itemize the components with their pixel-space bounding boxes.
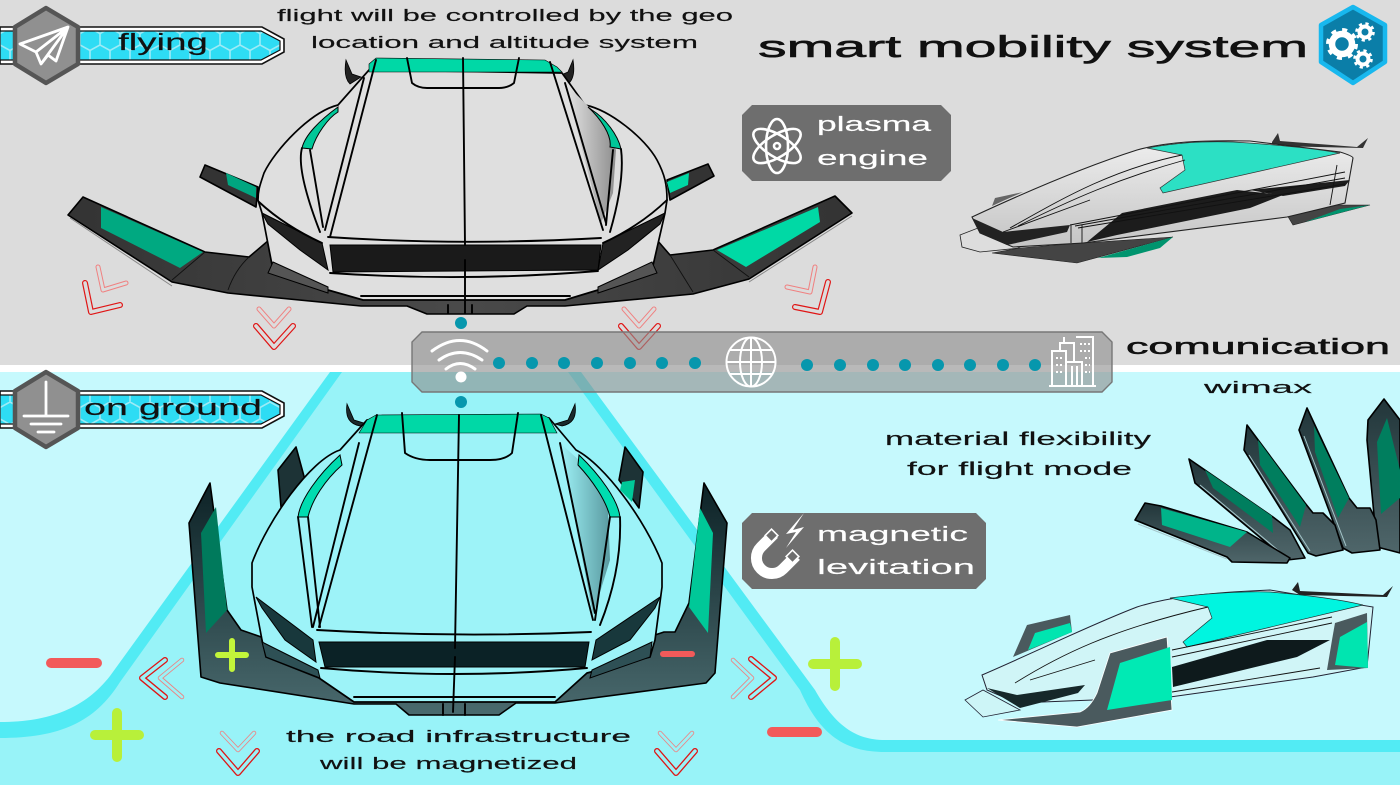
background: ground zone [0, 365, 1400, 785]
caption: flight control: location and altitude system [311, 33, 698, 52]
caption: magnetized road: the road infrastructure [286, 727, 631, 746]
caption: flight control [277, 6, 733, 52]
signal dots [493, 357, 1041, 371]
label: wimax: wimax [1202, 378, 1313, 397]
hull [982, 590, 1373, 703]
icon: atom [748, 119, 806, 173]
icon: wifi [432, 340, 487, 382]
rear mirrors [347, 404, 575, 426]
raised main wing [189, 483, 727, 715]
caption: flight control: flight will be controlled by the geo [277, 6, 733, 25]
icon: gears [1321, 7, 1385, 83]
teal canopy [1147, 142, 1340, 193]
banner: on ground [0, 391, 284, 428]
side view: ground mode [965, 582, 1393, 727]
caption: magnetized road [286, 727, 631, 773]
hull lines [1015, 607, 1332, 692]
chevron down right [657, 733, 695, 773]
front lip [960, 228, 1020, 252]
front lip [965, 690, 1020, 717]
title: smart mobility system [758, 29, 1308, 64]
wing flexibility sequence [1135, 399, 1400, 563]
white separator strip [0, 365, 1400, 372]
banner: flying [0, 27, 284, 64]
under fin [992, 237, 1173, 263]
body lines [298, 413, 620, 715]
chevron down left centre [256, 309, 293, 347]
car body [258, 70, 667, 300]
wing position 3 [1244, 425, 1343, 556]
car body [252, 418, 662, 702]
caption: material flexibility: material flexibility [885, 429, 1151, 449]
body shading [560, 443, 610, 615]
repulsion chevrons: ground [142, 659, 774, 773]
hex icon: paper plane [15, 8, 78, 83]
panel: magnetic levitation: levitation [817, 557, 975, 579]
panel: plasma engine [742, 105, 951, 181]
minus on right wing [663, 651, 692, 657]
rear wing [1327, 613, 1368, 670]
body shading [565, 83, 616, 223]
chevron down-left [85, 267, 126, 312]
lower bumper shading [262, 642, 652, 678]
label: flying: flying [118, 29, 208, 55]
headlight [987, 685, 1085, 708]
right headlight [592, 597, 660, 660]
black grille [330, 245, 601, 272]
panel: magnetic levitation [742, 513, 986, 589]
left headlight [262, 213, 328, 270]
lower bumper shading [268, 262, 657, 293]
chevron down-right [787, 267, 828, 312]
icon: magnet [756, 513, 804, 574]
side view: flying mode [960, 133, 1370, 263]
wing position 4 [1299, 408, 1380, 553]
plus right [813, 642, 857, 686]
hull lines [1003, 155, 1345, 243]
chevron right [733, 659, 774, 697]
plus lower left [95, 713, 139, 757]
wing position 1 [1135, 503, 1290, 563]
roof spoiler band [359, 414, 557, 433]
caption: material flexibility [885, 429, 1151, 479]
body lines [259, 58, 667, 313]
teal canopy [1170, 592, 1363, 647]
hull [972, 141, 1353, 247]
caption: magnetized road: will be magnetized [318, 754, 577, 773]
right fender accent [578, 455, 620, 517]
icon: city buildings [1049, 337, 1096, 386]
caption: material flexibility: for flight mode [907, 459, 1132, 479]
icon: globe [726, 337, 776, 387]
left fender accent [302, 107, 338, 149]
front wing [998, 637, 1172, 727]
label: on ground: on ground [84, 395, 262, 420]
far fin [1013, 615, 1072, 657]
dark rear stripe [1250, 180, 1350, 196]
small right wing [667, 164, 714, 200]
minus far left [51, 658, 97, 668]
chevron left [142, 660, 182, 697]
left fender accent [298, 455, 342, 517]
hex icon: ground symbol [15, 372, 78, 447]
downforce chevrons: flying [85, 267, 828, 347]
main wing [68, 196, 852, 314]
magnetic road infrastructure [0, 372, 1400, 785]
wing position 5 [1367, 399, 1400, 553]
label: comunication: comunication [1126, 334, 1390, 359]
right raised fin [619, 447, 643, 508]
connection dot above bar [455, 317, 467, 329]
wing position 2 [1189, 459, 1305, 560]
left raised fin [278, 447, 305, 507]
right headlight [598, 213, 665, 270]
chevron down left [219, 733, 257, 773]
spoiler [1272, 133, 1368, 148]
panel: magnetic levitation: magnetic [817, 524, 968, 546]
spoiler [1292, 582, 1393, 597]
plus on left wing [218, 641, 246, 669]
dark side intake [1087, 190, 1283, 242]
black grille [319, 642, 589, 667]
rear fin [1287, 205, 1370, 225]
background: flying zone [0, 0, 1400, 365]
headlight [972, 218, 1070, 245]
connection dot below bar [455, 396, 467, 408]
dark side intake [1172, 640, 1330, 687]
right fender accent [588, 107, 621, 149]
communication bar [412, 332, 1112, 392]
panel: plasma engine: engine [817, 148, 928, 170]
roof spoiler band [369, 58, 562, 72]
far fin [992, 192, 1023, 206]
chevron down right centre [621, 309, 658, 347]
left headlight [256, 597, 316, 662]
rear mirrors [345, 60, 574, 84]
minus lower right [772, 727, 817, 737]
flying car front view [68, 58, 852, 314]
panel: plasma engine: plasma [817, 114, 933, 136]
polarity signs [51, 641, 857, 757]
small left wing [200, 165, 258, 207]
ground car front view [189, 404, 727, 715]
